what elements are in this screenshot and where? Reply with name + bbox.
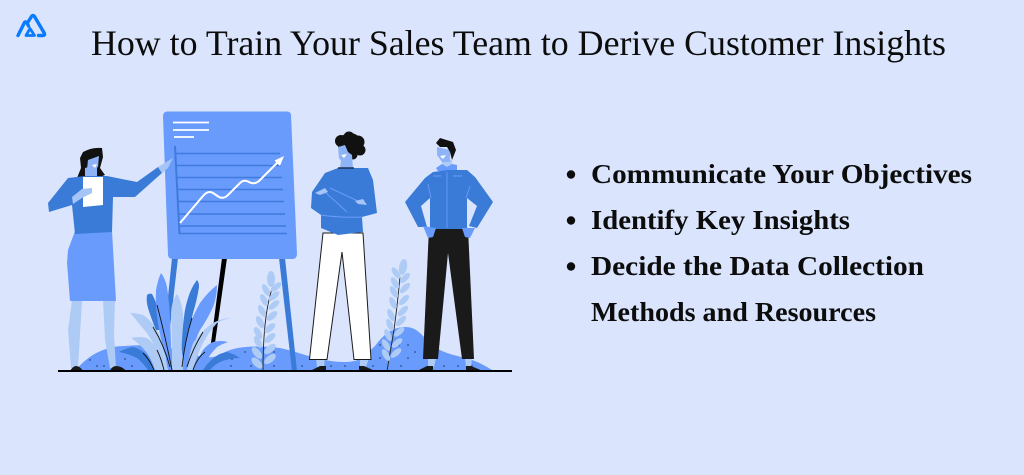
smile [440, 155, 446, 159]
ground dots [89, 344, 473, 367]
shoes [310, 366, 375, 371]
face [437, 147, 450, 162]
neck [85, 165, 97, 178]
collar [436, 164, 457, 172]
legs [428, 358, 472, 367]
trend arrow [180, 161, 279, 223]
illustration: sales team at chart board [48, 112, 512, 372]
folded arm lines [321, 188, 362, 217]
plant: small sprig [250, 271, 283, 371]
skirt [67, 231, 116, 301]
smile [92, 164, 97, 168]
jacket [405, 170, 493, 229]
bullet list [567, 159, 972, 327]
bullet item 3: Decide the Data Collection [591, 251, 924, 281]
neck [442, 160, 452, 170]
face [87, 156, 99, 170]
plant: large fern [119, 273, 240, 370]
pointing hand [158, 158, 173, 173]
person: man with crossed arms [310, 132, 377, 371]
hair [436, 138, 456, 160]
grid lines [176, 154, 287, 234]
hands [315, 188, 367, 205]
shoes [417, 366, 483, 371]
bullet item 3 [567, 251, 924, 327]
bullet item 1: Communicate Your Objectives [591, 159, 972, 189]
easel back leg [211, 258, 227, 343]
legs [68, 300, 82, 368]
shoes [70, 366, 83, 371]
icon: logo [18, 16, 45, 36]
hands [423, 226, 475, 238]
curly hair [335, 132, 366, 160]
sweater [311, 168, 377, 235]
plant: sprig between men [380, 258, 412, 371]
board text lines [173, 122, 209, 137]
bullet item 3: Methods and Resources [591, 297, 876, 327]
sweater [48, 167, 162, 234]
person: woman presenting [48, 148, 173, 371]
axis [175, 146, 180, 234]
holding hand [72, 188, 92, 204]
person: man with hands on hips [405, 138, 493, 371]
legs [316, 358, 369, 367]
hair [77, 148, 105, 178]
smile [341, 154, 347, 158]
face and neck [338, 145, 353, 168]
bullet item 2: Identify Key Insights [591, 205, 850, 235]
dark trousers [423, 228, 474, 359]
paper [83, 177, 103, 207]
easel right leg [279, 258, 297, 371]
chart board [163, 112, 297, 259]
white trousers [310, 233, 371, 360]
easel left leg [163, 258, 178, 345]
ground line [58, 370, 512, 372]
title: How to Train Your Sales Team to Derive Customer Insights [91, 23, 946, 63]
ground mounds [75, 327, 494, 371]
